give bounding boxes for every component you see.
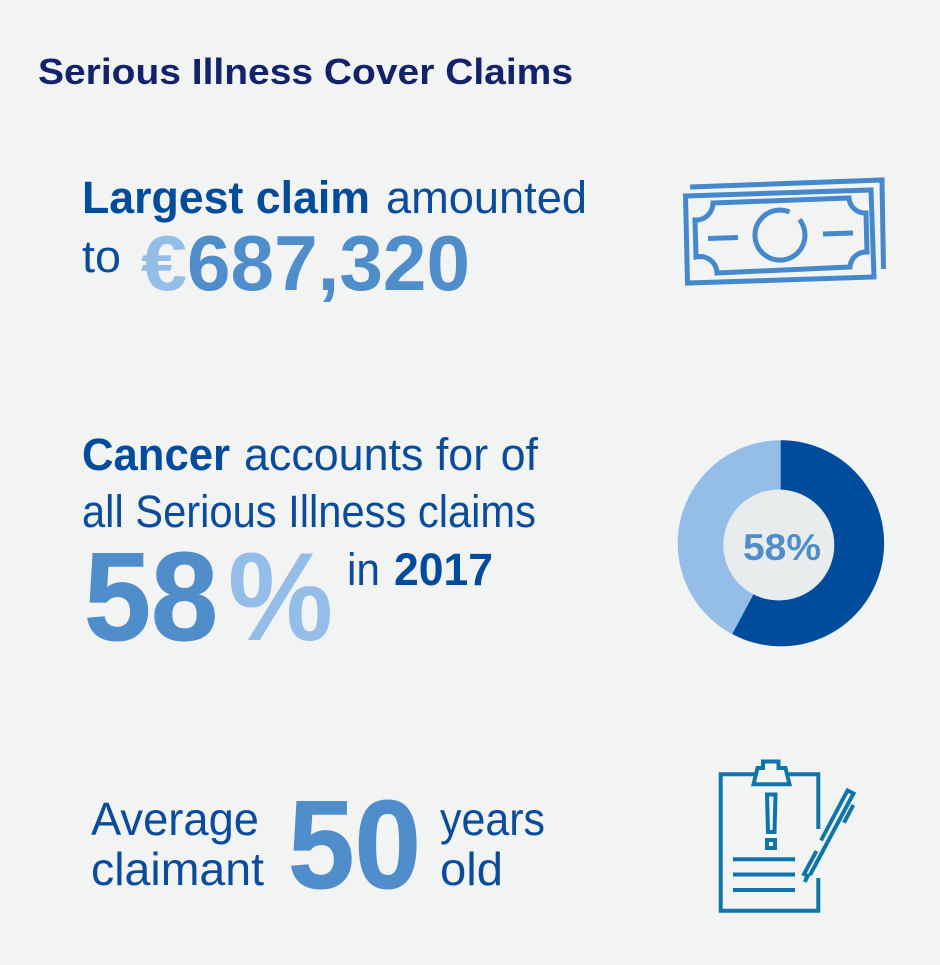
text block: cancer share bbox=[82, 429, 538, 667]
text block: average claimant age: 50 bbox=[288, 776, 421, 915]
donut chart: 58%: 58% bbox=[743, 527, 821, 568]
text block: average claimant age: claimant bbox=[91, 843, 264, 895]
text block: largest claim: € bbox=[141, 219, 187, 307]
text block: cancer share: % bbox=[228, 528, 333, 667]
text block: largest claim: to bbox=[82, 231, 121, 282]
text block: average claimant age: old bbox=[440, 843, 503, 895]
text block: largest claim: Largest claim bbox=[82, 172, 370, 223]
text block: cancer share: 2017 bbox=[394, 544, 493, 595]
text block: largest claim: 687,320 bbox=[187, 219, 470, 307]
text block: cancer share: in bbox=[347, 544, 380, 595]
icon: clipboard with pen bbox=[721, 762, 854, 911]
text block: cancer share: all Serious Illness claims bbox=[82, 486, 536, 537]
icon: banknotes bbox=[686, 180, 884, 283]
text block: average claimant age: years bbox=[440, 793, 545, 845]
text block: cancer share: Cancer bbox=[82, 429, 230, 480]
text block: average claimant age: Average bbox=[91, 793, 259, 845]
text block: cancer share: accounts for of bbox=[244, 429, 538, 480]
text block: largest claim bbox=[82, 172, 587, 307]
text block: cancer share: 58 bbox=[84, 528, 218, 667]
text block: largest claim: amounted bbox=[386, 172, 587, 223]
title: Serious Illness Cover Claims bbox=[38, 51, 573, 92]
text block: average claimant age bbox=[91, 776, 545, 915]
donut chart: 58% bbox=[678, 440, 884, 646]
